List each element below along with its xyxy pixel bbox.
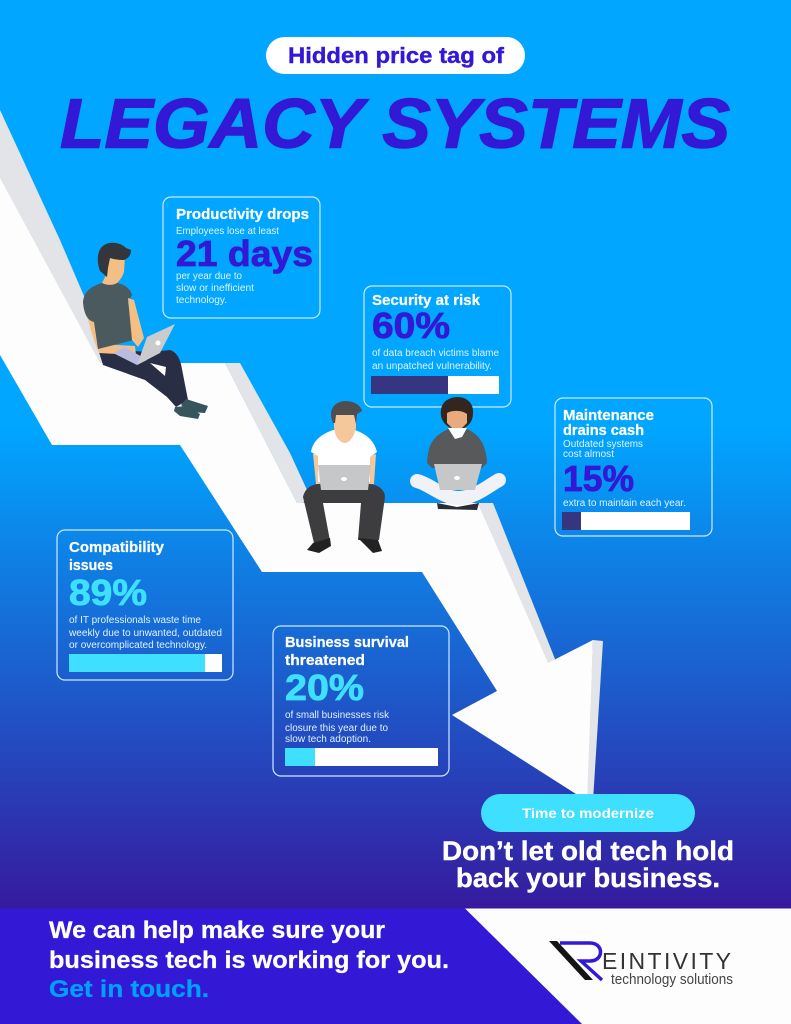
title: LEGACY SYSTEMS (60, 84, 730, 162)
body text: technology. (176, 295, 227, 306)
intro text: Outdated systems (563, 439, 643, 450)
subtitle pill: Hidden price tag of (288, 43, 505, 68)
body text (372, 348, 499, 372)
callout pill: time to modernize: Time to modernize (522, 805, 654, 821)
panel: productivity drops (163, 197, 320, 318)
subtitle pill (266, 37, 525, 74)
downward arrow (0, 110, 603, 801)
stat: 60%: 60% (372, 305, 450, 346)
heading: Maintenance (563, 408, 654, 424)
body text: of data breach victims blame (372, 348, 499, 359)
body text: extra to maintain each year. (563, 498, 686, 509)
heading (563, 408, 654, 439)
progress bar: 60% (371, 376, 499, 394)
intro text (563, 439, 643, 460)
panel: compatibility issues (57, 530, 233, 680)
call to action text: business tech is working for you. (49, 947, 449, 974)
body text (68, 615, 222, 651)
call to action text (49, 917, 449, 1003)
body text: slow or inefficient (176, 283, 254, 294)
logo: Reintivity: EINTIVITY (602, 948, 731, 974)
heading (69, 540, 164, 574)
closing statement (442, 836, 734, 893)
body text: or overcomplicated technology. (69, 640, 207, 651)
body text: of small businesses risk (285, 710, 390, 721)
body text (285, 710, 390, 745)
heading: Productivity drops (176, 207, 309, 223)
panel: business survival threatened (273, 626, 449, 776)
stat: 89%: 89% (69, 572, 147, 613)
stat: 20%: 20% (285, 667, 364, 708)
progress bar: 15% (562, 512, 690, 530)
body text: of IT professionals waste time (69, 615, 201, 626)
progress bar: 89% (69, 654, 222, 672)
figure: man on laptop, top of arrow (83, 243, 208, 419)
body text: closure this year due to (285, 723, 388, 734)
heading: Business survival (285, 635, 409, 651)
closing statement: Don’t let old tech hold (442, 836, 734, 866)
footer band (0, 908, 791, 1024)
heading: issues (69, 558, 113, 574)
body text: slow tech adoption. (285, 734, 371, 745)
figure: woman sitting cross-legged with laptop (417, 397, 499, 510)
logo: Reintivity (549, 941, 733, 988)
figure: man sitting with laptop (303, 401, 385, 553)
heading: Compatibility (69, 540, 164, 556)
intro text: cost almost (563, 449, 614, 460)
body text: an unpatched vulnerability. (372, 361, 492, 372)
body text: weekly due to unwanted, outdated (68, 628, 222, 639)
body text: per year due to (176, 271, 242, 282)
panel: maintenance drains cash (555, 398, 712, 536)
call to action text: Get in touch. (49, 976, 209, 1003)
heading: threatened (285, 653, 365, 669)
panel: security at risk (364, 286, 511, 407)
heading (285, 635, 409, 669)
logo: Reintivity: technology solutions (611, 971, 733, 988)
heading: drains cash (563, 423, 644, 439)
stat: 15%: 15% (563, 458, 634, 499)
closing statement: back your business. (456, 863, 720, 893)
heading: Security at risk (372, 293, 481, 309)
call to action text: We can help make sure your (49, 917, 385, 944)
intro text: Employees lose at least (176, 226, 279, 237)
body text (176, 271, 254, 306)
callout pill: time to modernize (481, 794, 695, 832)
progress bar: 20% (285, 748, 438, 766)
stat: 21 days: 21 days (176, 233, 313, 274)
